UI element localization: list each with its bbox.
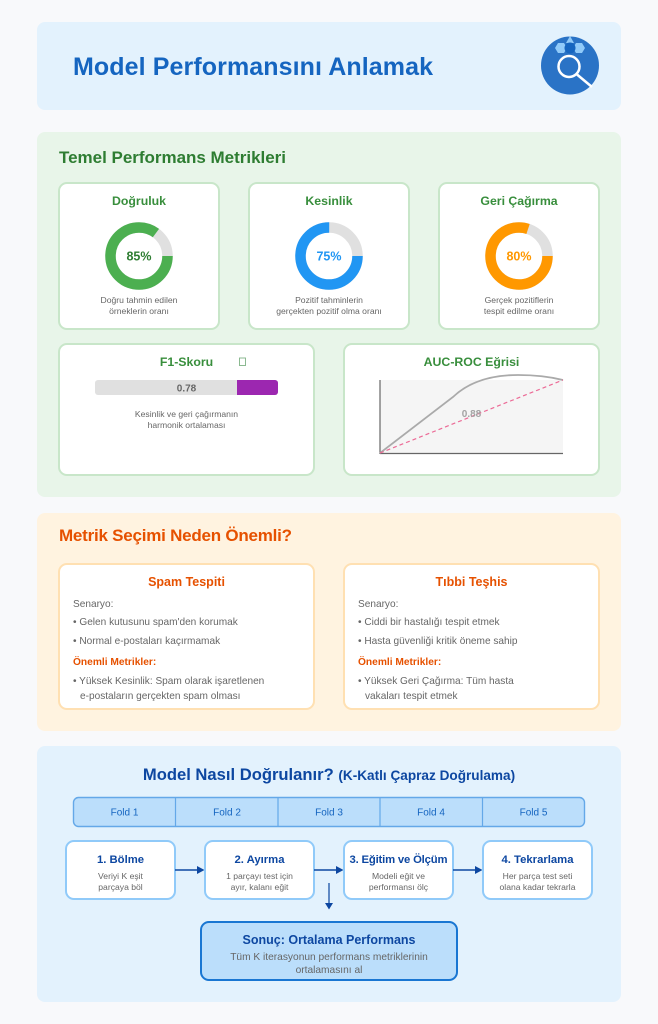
card: spam detection: e-postaların gerçekten spam olması	[80, 691, 240, 702]
step 4: olana kadar tekrarla	[500, 882, 576, 892]
result box: Tüm K iterasyonun performans metriklerinin	[230, 952, 428, 963]
card: precision	[249, 183, 409, 329]
card: spam detection: Senaryo:	[73, 599, 113, 610]
arrow: step 2 to 3	[314, 866, 344, 874]
panel: validation	[37, 746, 621, 1002]
card: medical diagnosis: Tıbbi Teşhis	[436, 575, 508, 589]
step 1: 1. Bölme	[97, 854, 144, 866]
bar: F1 value: 0.78	[177, 384, 197, 394]
step 2: ayır, kalanı eğit	[231, 882, 289, 892]
arrow: down to result	[325, 883, 333, 910]
result box	[201, 922, 457, 980]
arrow: step 3 to 4	[453, 866, 482, 874]
result box: ortalamasını al	[296, 965, 362, 976]
card: recall	[439, 183, 599, 329]
card: spam detection: Spam Tespiti	[148, 575, 225, 589]
card: AUC-ROC	[344, 344, 599, 475]
card: medical diagnosis: Önemli Metrikler:	[358, 655, 441, 668]
chart: ROC curve	[380, 375, 563, 454]
card: accuracy: Doğru tahmin edilen	[101, 295, 178, 305]
step 2	[205, 841, 314, 899]
card: F1 score: harmonik ortalaması	[148, 420, 225, 430]
card: F1 score: F1-Skoru	[160, 355, 213, 369]
card: precision: Pozitif tahminlerin	[295, 295, 363, 305]
title: Model Performansını Anlamak	[73, 53, 433, 81]
fold strip: Fold 2	[213, 808, 241, 818]
card: accuracy	[59, 183, 219, 329]
step 2: 1 parçayı test için	[226, 871, 293, 881]
icon: magnifier over network	[541, 36, 599, 94]
fold strip: Fold 4	[417, 808, 445, 818]
step 3: Modeli eğit ve	[372, 871, 425, 881]
card: spam detection: • Gelen kutusunu spam'den korumak	[73, 617, 239, 628]
step 2: 2. Ayırma	[234, 854, 285, 866]
step 4: Her parça test seti	[503, 871, 572, 881]
card: accuracy: örneklerin oranı	[109, 306, 169, 316]
heading: metric selection: Metrik Seçimi Neden Önemli?	[59, 526, 292, 545]
card: recall: tespit edilme oranı	[484, 306, 554, 316]
step 1	[66, 841, 175, 899]
card: AUC-ROC: AUC-ROC Eğrisi	[424, 355, 519, 369]
step 1: Veriyi K eşit	[98, 871, 144, 881]
arrow: step 1 to 2	[175, 866, 204, 874]
card: precision: Kesinlik	[305, 194, 353, 208]
result box: Sonuç: Ortalama Performans	[243, 933, 416, 947]
card: recall: 80%	[506, 250, 532, 264]
card: medical diagnosis: vakaları tespit etmek	[365, 691, 459, 702]
card: recall: Gerçek pozitiflerin	[485, 295, 554, 305]
fold strip: Fold 1	[111, 808, 139, 818]
chart: ROC curve: 0.88	[462, 409, 482, 420]
card: medical diagnosis	[344, 564, 599, 709]
card: medical diagnosis: Senaryo:	[358, 599, 398, 610]
card: recall: Geri Çağırma	[480, 194, 558, 208]
fold strip: Fold 5	[520, 808, 548, 818]
heading: core metrics: Temel Performans Metrikleri	[59, 148, 286, 167]
panel: core metrics	[37, 132, 621, 497]
card: accuracy: Doğruluk	[112, 194, 166, 208]
card: spam detection	[59, 564, 314, 709]
card: F1 score: Kesinlik ve geri çağırmanın	[135, 409, 238, 419]
card: spam detection: Önemli Metrikler:	[73, 655, 156, 668]
card: medical diagnosis: • Hasta güvenliği kritik öneme sahip	[358, 636, 518, 647]
card: F1 score	[59, 344, 314, 475]
card: medical diagnosis: • Yüksek Geri Çağırma: Tüm hasta	[358, 676, 514, 687]
step 3: 3. Eğitim ve Ölçüm	[350, 853, 448, 866]
panel: metric selection	[37, 513, 621, 731]
step 3: performansı ölç	[369, 882, 429, 892]
fold strip	[74, 797, 584, 827]
step 3	[344, 841, 453, 899]
card: precision: gerçekten pozitif olma oranı	[276, 306, 382, 316]
bar: F1 value	[95, 380, 278, 395]
card: medical diagnosis: • Ciddi bir hastalığı tespit etmek	[358, 617, 500, 628]
step 4: 4. Tekrarlama	[501, 854, 574, 866]
step 1: parçaya böl	[98, 882, 143, 892]
heading: validation: Model Nasıl Doğrulanır? (K-Katlı Çapraz Doğrulama)	[143, 765, 515, 784]
card: precision: 75%	[316, 250, 342, 264]
panel: header	[37, 22, 621, 110]
card: spam detection: • Normal e-postaları kaçırmamak	[73, 636, 221, 647]
card: accuracy: 85%	[126, 250, 152, 264]
icon: missing glyph box	[240, 358, 246, 366]
step 4	[483, 841, 592, 899]
card: spam detection: • Yüksek Kesinlik: Spam olarak işaretlenen	[73, 676, 264, 687]
fold strip: Fold 3	[315, 808, 343, 818]
